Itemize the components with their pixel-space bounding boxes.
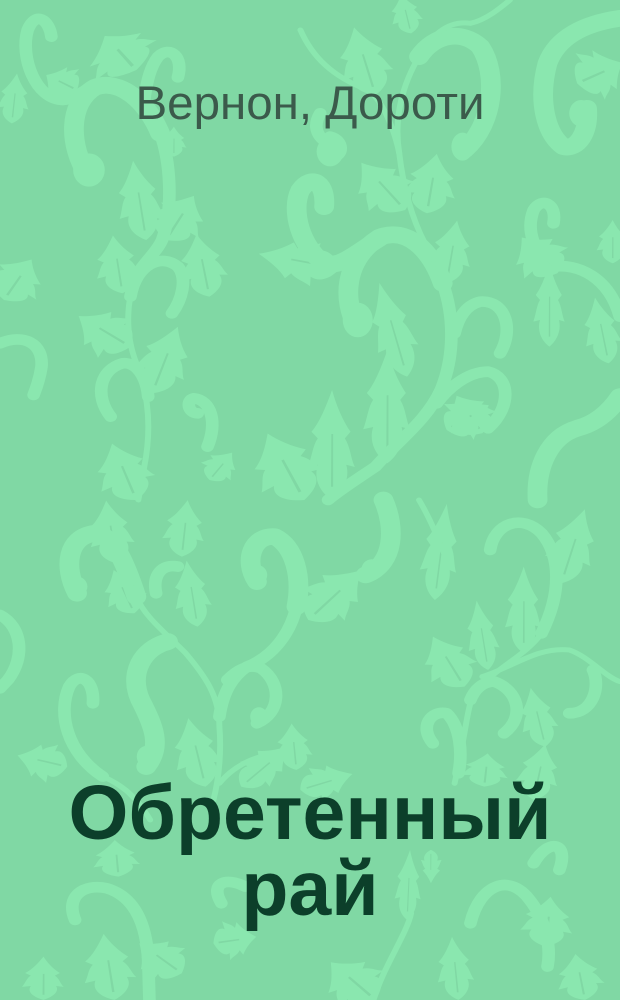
book title: Обретенный xyxy=(69,770,551,856)
book title xyxy=(69,770,551,932)
book title: рай xyxy=(241,846,379,932)
author name: Вернон, Дороти xyxy=(136,77,484,130)
